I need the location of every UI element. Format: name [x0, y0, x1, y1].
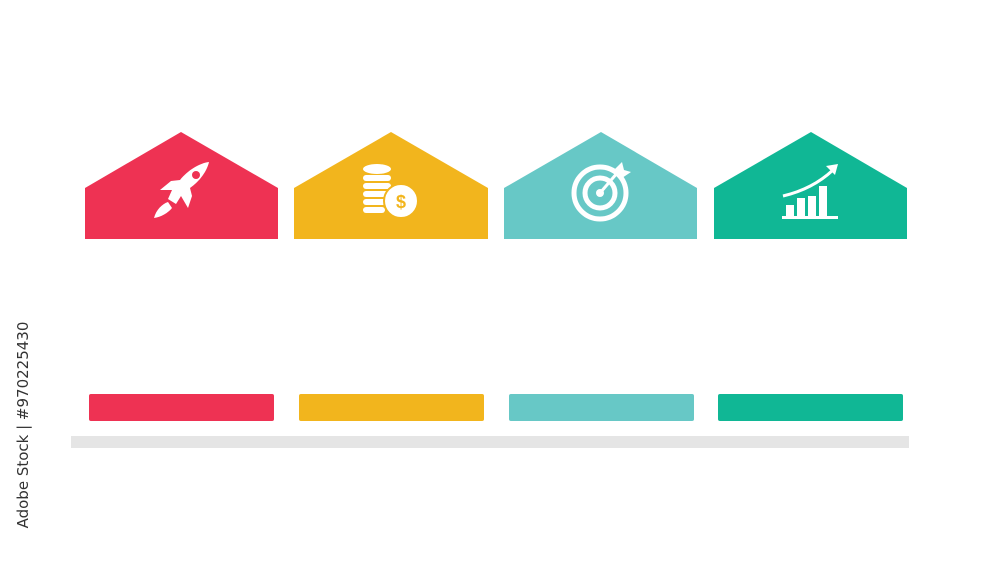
baseline bar [71, 436, 909, 448]
panel: yellow coins [294, 132, 488, 239]
icon: coins: $ [396, 192, 406, 212]
bar: red [89, 394, 274, 421]
icon: rocket [154, 162, 209, 218]
icon: bar chart growth [782, 164, 838, 219]
watermark text: Adobe Stock | #970225430 [14, 322, 32, 528]
bar: teal [509, 394, 694, 421]
panel: green growth [714, 132, 907, 239]
panel: teal target [504, 132, 697, 239]
icon: target [574, 162, 631, 219]
icon: coins [363, 164, 418, 218]
bar: green [718, 394, 903, 421]
bar: yellow [299, 394, 484, 421]
panel: red rocket [85, 132, 278, 239]
